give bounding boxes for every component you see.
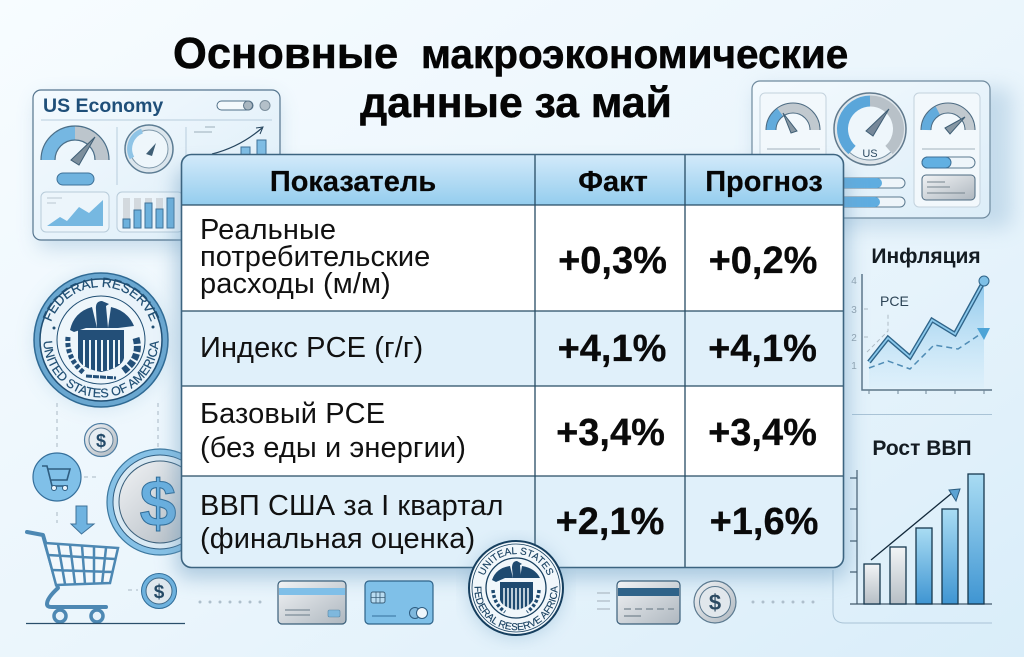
icon: right gauge — [921, 103, 975, 149]
dashboard heading: US Economy — [43, 95, 163, 117]
icon: cart button — [33, 453, 81, 501]
row: real consumer spending — [182, 205, 843, 311]
grey info card — [922, 175, 975, 200]
seal text: top: FEDERAL RESERVE — [42, 278, 160, 322]
icon: round dial — [125, 125, 173, 173]
icon: small dollar coin — [84, 424, 118, 456]
panel: right chart frame — [833, 414, 992, 623]
title: макроэкономические — [421, 31, 848, 77]
mini bar chart card — [117, 192, 183, 232]
seal text: bottom: FEDERAL RESERVE AFRICA — [474, 586, 558, 630]
icon: grey credit card — [597, 581, 680, 624]
seal: Federal Reserve bottom — [461, 535, 571, 645]
line chart: inflation: 4 — [851, 276, 857, 287]
gauge label: US — [862, 148, 878, 160]
icon: blue credit card — [365, 581, 433, 624]
table header row: Факт — [578, 166, 648, 198]
bar chart: GDP growth — [850, 470, 992, 604]
icon: down arrow — [71, 506, 94, 534]
row: PCE index: Индекс PCE (г/г) — [200, 332, 423, 364]
icon: dollar coin bottom: $ — [709, 590, 721, 615]
dashed connector lines — [57, 403, 158, 590]
seal: Federal Reserve large — [28, 268, 172, 413]
row: real consumer spending: +0,2% — [709, 240, 817, 282]
heading: Инфляция: Инфляция — [871, 245, 981, 268]
line chart: inflation — [851, 274, 992, 394]
icon: left gauge — [766, 103, 820, 149]
row: PCE index — [182, 311, 843, 386]
heading: Рост ВВП: Рост ВВП — [872, 437, 972, 460]
icon: mini growth chart — [194, 127, 266, 160]
row: core PCE: +3,4% — [556, 412, 665, 454]
table header row: Прогноз — [705, 166, 823, 198]
panel: gauges dashboard — [752, 81, 1012, 228]
row: US GDP: (финальная оценка) — [200, 523, 475, 555]
line chart: inflation: 2 — [851, 333, 857, 344]
row: real consumer spending: потребительские — [200, 241, 430, 273]
line chart: inflation: 3 — [851, 305, 857, 316]
row: core PCE: +3,4% — [708, 412, 817, 454]
row: US GDP: +1,6% — [710, 501, 818, 543]
title: данные за май — [360, 79, 672, 127]
row: PCE index: +4,1% — [558, 328, 666, 370]
row: core PCE: Базовый PCE — [200, 398, 385, 430]
mini area chart card — [41, 192, 109, 232]
icon: white credit card — [278, 581, 346, 624]
line chart: inflation: 1 — [851, 361, 857, 372]
icon: large dollar coin: $ — [140, 466, 176, 540]
row: US GDP — [182, 476, 843, 568]
panel: US Economy dashboard — [33, 90, 280, 248]
eagle — [70, 307, 134, 332]
icon: dollar coin by cart: $ — [154, 582, 165, 603]
row: real consumer spending: Реальные — [200, 214, 336, 246]
icon: dollar coin by cart — [142, 574, 176, 608]
icon: small dollar coin: $ — [96, 431, 106, 451]
seal text: top: UNITEAL STATES — [478, 547, 554, 575]
row: real consumer spending: +0,3% — [558, 240, 667, 282]
table header row — [182, 154, 844, 205]
icon: large dollar coin — [107, 449, 213, 555]
row: core PCE: (без еды и энергии) — [200, 432, 466, 464]
icon: dollar coin bottom — [694, 581, 736, 623]
row: US GDP: +2,1% — [556, 501, 664, 543]
row: PCE index: +4,1% — [708, 328, 817, 370]
progress bars — [830, 157, 975, 207]
row: US GDP: ВВП США за I квартал — [200, 490, 504, 522]
table header row: Показатель — [270, 166, 436, 198]
seal text: bottom: UNITED STATES OF AMERICA — [44, 341, 159, 398]
title — [173, 30, 848, 127]
title: Основные — [173, 30, 398, 78]
icon: shopping cart — [26, 532, 185, 624]
icon: semicircular gauge — [41, 126, 109, 185]
row: real consumer spending: расходы (м/м) — [200, 268, 391, 300]
window controls — [217, 100, 270, 110]
icon: central US gauge — [834, 93, 906, 165]
panel: data table — [182, 154, 844, 568]
row: core PCE — [182, 386, 843, 476]
table shadow — [176, 168, 848, 578]
chart label PCE: PCE — [880, 293, 909, 309]
decorative dots — [200, 600, 815, 604]
